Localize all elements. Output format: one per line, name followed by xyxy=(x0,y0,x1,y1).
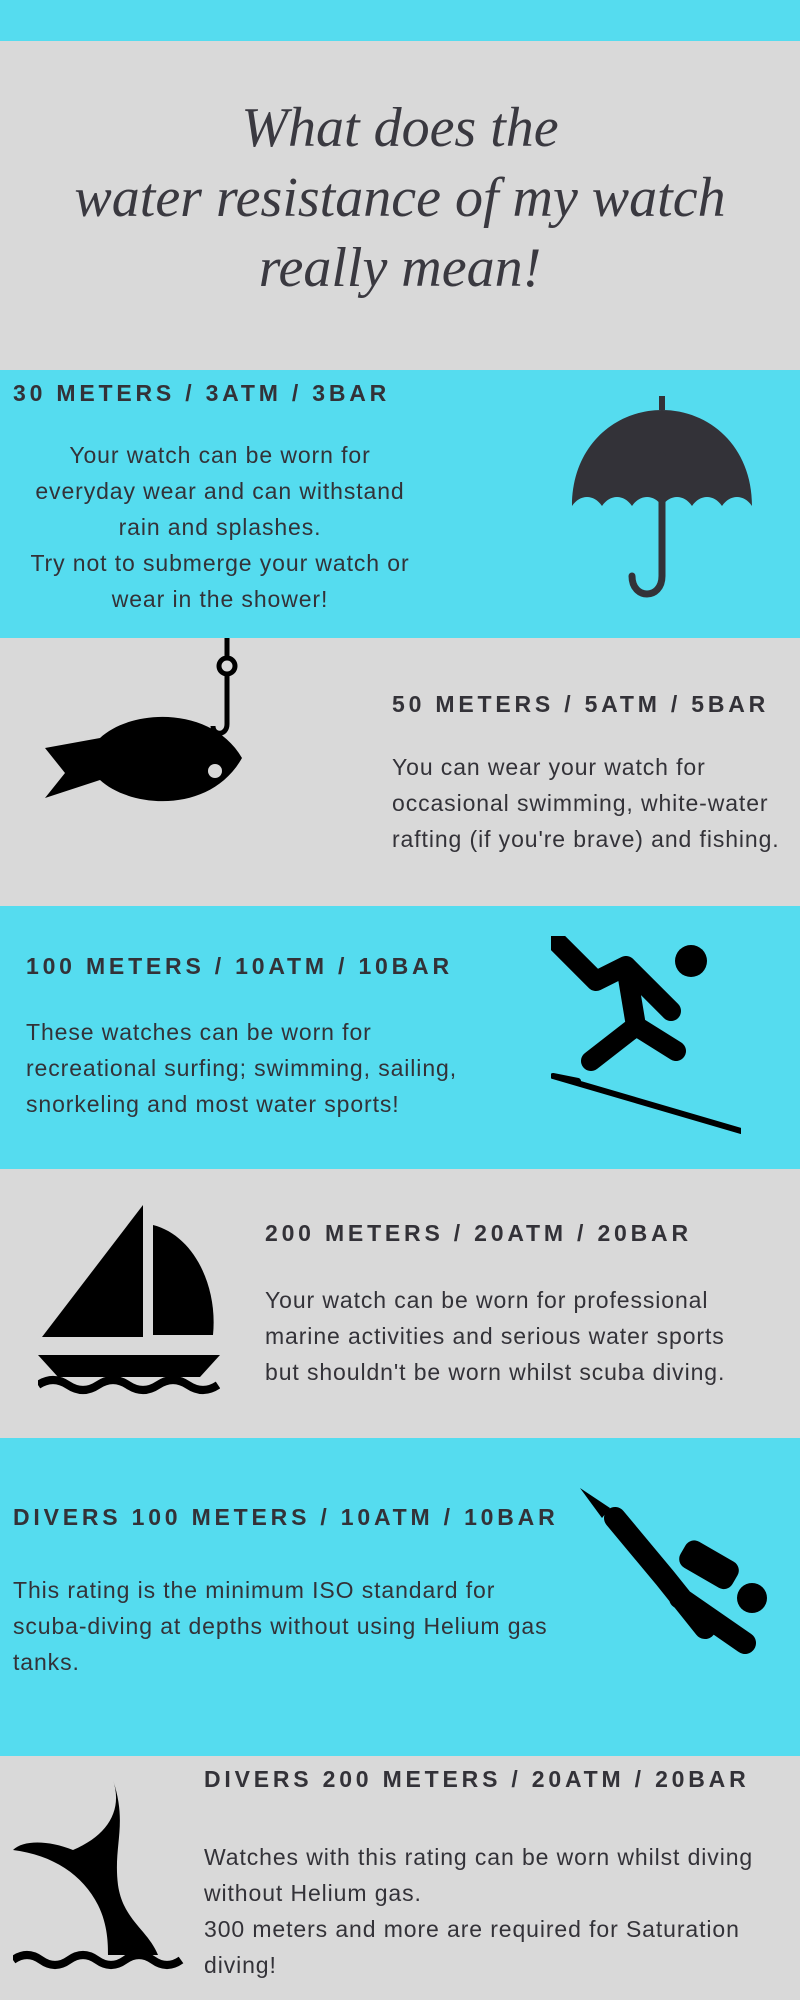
text: scuba-diving at depths without using Helium gas xyxy=(13,1613,548,1639)
text: snorkeling and most water sports! xyxy=(26,1091,400,1117)
text: rafting (if you're brave) and fishing. xyxy=(392,826,780,852)
heading: 100 METERS / 10ATM / 10BAR xyxy=(26,953,453,979)
text xyxy=(30,442,410,612)
text: but shouldn't be worn whilst scuba diving. xyxy=(265,1359,725,1385)
text: rain and splashes. xyxy=(119,514,321,540)
text: diving! xyxy=(204,1952,277,1978)
icon: surfer xyxy=(551,936,741,1134)
heading: 30 METERS / 3ATM / 3BAR xyxy=(13,380,390,406)
text xyxy=(204,1844,753,1978)
text: without Helium gas. xyxy=(204,1880,422,1906)
icon: whale tail xyxy=(13,1782,184,1970)
icon: fish on hook xyxy=(45,638,242,802)
text: 300 meters and more are required for Saturation xyxy=(204,1916,740,1942)
text: You can wear your watch for xyxy=(392,754,706,780)
heading: 200 METERS / 20ATM / 20BAR xyxy=(265,1220,692,1246)
text: everyday wear and can withstand xyxy=(35,478,405,504)
text: occasional swimming, white-water xyxy=(392,790,768,816)
text: wear in the shower! xyxy=(112,586,328,612)
text xyxy=(13,1577,548,1675)
text xyxy=(26,1019,457,1117)
icon: umbrella xyxy=(572,396,752,598)
text: Your watch can be worn for xyxy=(69,442,371,468)
text: tanks. xyxy=(13,1649,80,1675)
title: water resistance of my watch xyxy=(74,167,726,229)
text xyxy=(392,754,780,852)
text: marine activities and serious water sports xyxy=(265,1323,725,1349)
text: These watches can be worn for xyxy=(26,1019,372,1045)
text: Your watch can be worn for professional xyxy=(265,1287,708,1313)
title xyxy=(74,97,726,299)
panel: divers 200 xyxy=(0,1756,800,2000)
heading: 50 METERS / 5ATM / 5BAR xyxy=(392,691,769,717)
icon: sailboat xyxy=(38,1205,220,1394)
panel: 200 meters xyxy=(0,1169,800,1438)
heading: DIVERS 100 METERS / 10ATM / 10BAR xyxy=(13,1504,558,1530)
text: recreational surfing; swimming, sailing, xyxy=(26,1055,457,1081)
text: Try not to submerge your watch or xyxy=(30,550,410,576)
title: really mean! xyxy=(259,237,541,299)
text xyxy=(265,1287,725,1385)
heading: DIVERS 200 METERS / 20ATM / 20BAR xyxy=(204,1766,749,1792)
text: Watches with this rating can be worn whilst diving xyxy=(204,1844,753,1870)
panel: divers 100 xyxy=(0,1438,800,1756)
top cyan bar xyxy=(0,0,800,41)
panel: 30 meters xyxy=(0,370,800,638)
panel: 100 meters xyxy=(0,906,800,1169)
icon: diver xyxy=(580,1488,767,1654)
text: This rating is the minimum ISO standard for xyxy=(13,1577,495,1603)
panel: 50 meters xyxy=(0,638,800,906)
title: What does the xyxy=(241,97,559,159)
title panel xyxy=(0,41,800,370)
